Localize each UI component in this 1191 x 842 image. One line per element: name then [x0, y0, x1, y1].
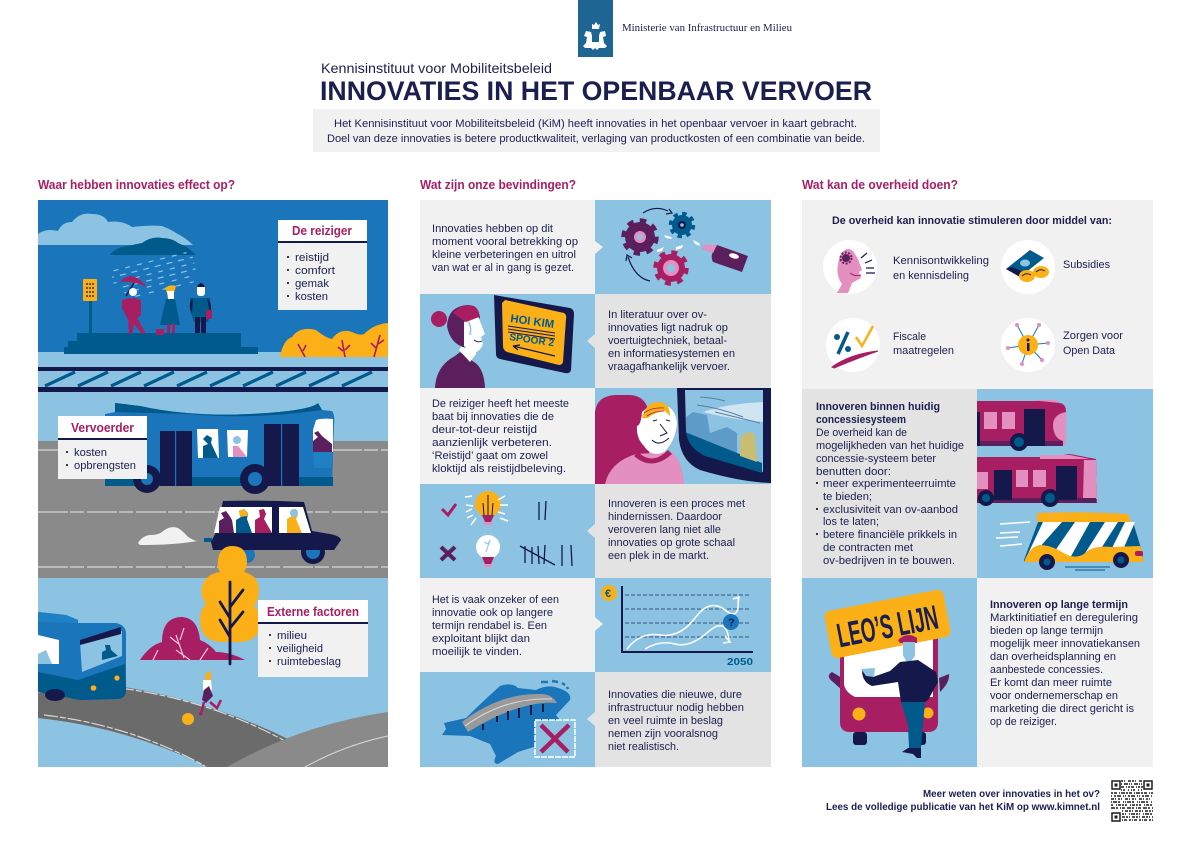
footer text: Meer weten over innovaties in het ov?: [923, 789, 1100, 800]
blue bus: [105, 403, 334, 494]
text: finding 1: kleine verbeteringen en uitrol: [432, 249, 576, 261]
heading: findings: Wat zijn onze bevindingen?: [420, 178, 576, 192]
blue bus front: [38, 612, 126, 701]
box: De reiziger: kosten: [295, 291, 328, 303]
label: fiscale maatregelen: Fiscale: [893, 331, 926, 343]
text: finding 5: moeilijk te vinden.: [432, 646, 522, 658]
text: finding 3: kloktijd als reistijdbeleving.: [432, 463, 566, 475]
icon: subsidies: [1001, 240, 1055, 294]
chart: uncertain profitability until 2050: €: [605, 588, 611, 600]
illustration: striped amber shuttle: [996, 512, 1143, 570]
text: finding 6: niet realistisch.: [608, 741, 679, 753]
intro text block: Het Kennisinstituut voor Mobiliteitsbeleid (KiM) heeft innovaties in het openbaar vervoer in kaart gebracht.: [334, 118, 857, 130]
text: finding 2: en informatiesystemen en: [608, 348, 735, 360]
text: finding 1: van wat er al in gang is gezet.: [432, 262, 574, 274]
title: INNOVATIES IN HET OPENBAAR VERVOER: [320, 76, 872, 106]
navy car: [204, 501, 341, 564]
illustration: magenta bus top: [977, 400, 1066, 451]
traveller in dress: [156, 285, 180, 335]
text: current system: concessiesysteem: [816, 414, 906, 426]
box: Vervoerder: kosten: [74, 447, 107, 459]
illustration: woman at information screen: [431, 295, 574, 388]
text: finding 4: veroveren lang niet alle: [608, 524, 721, 536]
illustration: woman at information screen: SPOOR 2: [509, 332, 555, 349]
chart: uncertain profitability until 2050: ?: [728, 617, 735, 629]
cloud light: [38, 214, 193, 245]
footer text: Lees de volledige publicatie van het KiM op www.kimnet.nl: [826, 802, 1100, 813]
text: long term: voor ondernemerschap en: [990, 690, 1118, 702]
text: current system: concessie-systeem beter: [816, 453, 936, 465]
text: current system: exclusiviteit van ov-aanbod: [823, 504, 958, 516]
text: current system: ov-bedrijven in te bouwen.: [823, 555, 955, 567]
text: current system: De overheid kan de: [816, 427, 907, 439]
icon: open data: [1001, 318, 1055, 372]
subtitle: Kennisinstituut voor Mobiliteitsbeleid: [321, 60, 552, 76]
text: finding 6: [608, 689, 744, 753]
text: finding 5: [432, 594, 559, 658]
instruments heading: De overheid kan innovatie stimuleren door middel van:: [832, 215, 1112, 227]
icon: gears and oil can: [624, 208, 748, 284]
traveller with bag: [190, 283, 212, 333]
text: long term: Innoveren op lange termijn: [990, 599, 1128, 611]
label: fiscale maatregelen: [893, 331, 954, 357]
text: finding 6: infrastructuur nodig hebben: [608, 702, 744, 714]
text: finding 1: Innovaties hebben op dit: [432, 223, 553, 235]
section: current concession system: [802, 389, 1153, 578]
box: Externe factoren: ruimtebeslag: [277, 656, 341, 668]
text: finding 6: Innovaties die nieuwe, dure: [608, 689, 742, 701]
box: De reiziger: [278, 220, 367, 310]
box: De reiziger: comfort: [295, 265, 335, 277]
box: Vervoerder: [58, 416, 147, 479]
text: current system: te bieden;: [823, 491, 872, 503]
illustration: magenta bus middle: [977, 454, 1097, 507]
text: current system: los te laten;: [823, 516, 879, 528]
box: De reiziger: De reiziger: [292, 223, 352, 238]
illustration: LEO's Lijn bus with man: [824, 589, 951, 758]
text: finding 2: [608, 309, 735, 373]
traveller with umbrella: [120, 276, 147, 334]
platform: [64, 333, 258, 354]
text: finding 3: baat bij innovaties die de: [432, 411, 554, 423]
text: finding 2: innovaties ligt nadruk op: [608, 322, 728, 334]
panel: left illustration: [38, 200, 388, 767]
winding road: [38, 686, 388, 767]
text: current system: betere financiële prikkels in: [823, 529, 957, 541]
text: long term: mogelijk meer innovatiekansen: [990, 638, 1140, 650]
text: long term: Marktinitiatief en deregulering: [990, 612, 1138, 624]
box: Vervoerder: opbrengsten: [74, 460, 136, 472]
text: finding 5: termijn rendabel is. Een: [432, 620, 547, 632]
section: long term: [802, 578, 1153, 767]
text: finding 4: een plek in de markt.: [608, 550, 709, 562]
QR code: [1111, 780, 1153, 822]
text: finding 1: moment vooral betrekking op: [432, 236, 578, 248]
icon: fiscal measures: [826, 318, 880, 372]
text: finding 3: aanzienlijk verbeteren.: [432, 437, 552, 449]
illustration: traveller at train window: [595, 388, 771, 484]
magenta bush: [140, 617, 245, 660]
label: kennis: en kennisdeling: [893, 270, 969, 282]
label: open data: Zorgen voor: [1063, 330, 1123, 342]
text: finding 3: deur-tot-deur reistijd: [432, 424, 537, 436]
label: subsidies: Subsidies: [1063, 259, 1110, 271]
railway track: [38, 367, 388, 392]
text: long term: bieden op lange termijn: [990, 625, 1103, 637]
row 2: [420, 294, 771, 388]
rain: [111, 251, 199, 301]
bus stop sign: [83, 279, 97, 334]
label: open data: [1063, 330, 1123, 357]
box: De reiziger: gemak: [295, 278, 329, 290]
text: finding 5: innovatie ook op langere: [432, 607, 553, 619]
intro text block: Doel van deze innovaties is betere productkwaliteit, verlaging van productkosten of een combinatie van beide.: [327, 133, 865, 145]
chart: uncertain profitability until 2050: 2050: [727, 656, 753, 668]
running child: [199, 671, 221, 714]
cloud dark: [110, 238, 196, 255]
text: current system: de contracten met: [823, 542, 913, 554]
box: Externe factoren: [258, 600, 368, 677]
row 4: [420, 484, 771, 578]
text: long term: dan overheidsplanning en: [990, 651, 1116, 663]
text: long term: Er komt dan meer ruimte: [990, 677, 1112, 689]
scene background: [38, 200, 388, 767]
illustration: costly bridge crossed out: [442, 681, 575, 764]
text: long term: marketing die direct gericht is: [990, 703, 1134, 715]
text: finding 3: De reiziger heeft het meeste: [432, 398, 569, 410]
amber bushes: [280, 323, 388, 357]
text: finding 4: Innoveren is een proces met: [608, 498, 745, 510]
row 5: [420, 578, 771, 672]
exhaust cloud: [138, 527, 197, 545]
text: current system: meer experimenteerruimte: [823, 478, 956, 490]
text: finding 4: hindernissen. Daardoor: [608, 511, 722, 523]
text: current system: [816, 401, 964, 567]
chart: uncertain profitability until 2050: [601, 585, 753, 668]
box: Externe factoren: Externe factoren: [267, 604, 359, 619]
text: long term: aanbestede concessies.: [990, 664, 1103, 676]
text: finding 2: In literatuur over ov-: [608, 309, 707, 321]
text: finding 5: exploitant blijkt dan: [432, 633, 530, 645]
box: Externe factoren: milieu: [277, 630, 307, 642]
text: finding 1: [432, 223, 578, 274]
text: finding 4: innovaties op grote schaal: [608, 537, 735, 549]
ministry name: Ministerie van Infrastructuur en Milieu: [622, 23, 793, 34]
row 3: [420, 388, 771, 484]
icon: knowledge: [823, 240, 877, 294]
text: finding 2: vraagafhankelijk vervoer.: [608, 361, 730, 373]
text: finding 3: ‘Reistijd’ gaat om zowel: [432, 450, 548, 462]
illustration: LEO's Lijn bus with man: LEO’S LIJN: [834, 599, 941, 655]
ball: [182, 713, 194, 725]
panel: government: [802, 200, 1153, 767]
text: finding 3: [432, 398, 569, 475]
text: finding 4: [608, 498, 745, 562]
text: current system: Innoveren binnen huidig: [816, 401, 940, 413]
footer text: [826, 789, 1100, 813]
heading: effect: Waar hebben innovaties effect op?: [38, 178, 235, 192]
box: Vervoerder: Vervoerder: [71, 420, 134, 435]
section: instruments: [802, 200, 1153, 389]
label: fiscale maatregelen: maatregelen: [893, 345, 954, 357]
text: long term: op de reiziger.: [990, 716, 1057, 728]
heading: government: Wat kan de overheid doen?: [802, 178, 958, 192]
text: finding 5: Het is vaak onzeker of een: [432, 594, 559, 606]
row 6: [420, 672, 771, 767]
box: De reiziger: reistijd: [295, 252, 329, 264]
box: Externe factoren: veiligheid: [277, 643, 323, 655]
illustration: woman at information screen: HOI KIM: [510, 313, 555, 331]
text: current system: mogelijkheden van het huidige: [816, 440, 964, 452]
label: open data: Open Data: [1063, 345, 1116, 357]
panel: findings: [420, 200, 771, 767]
icon: success and failure tallies: [441, 491, 572, 567]
label: kennis: [893, 255, 989, 282]
text: finding 6: en veel ruimte in beslag: [608, 715, 723, 727]
intro text block: [313, 109, 880, 152]
text: finding 2: voertuigtechniek, betaal-: [608, 335, 727, 347]
amber tree: [200, 546, 260, 664]
text: long term: [990, 599, 1140, 728]
label: kennis: Kennisontwikkeling: [893, 255, 989, 267]
text: finding 6: nemen zijn vooralsnog: [608, 728, 718, 740]
row 1: [420, 200, 771, 294]
logo: Rijksoverheid ribbon with coat of arms: [578, 0, 613, 57]
text: current system: benutten door:: [816, 466, 891, 478]
